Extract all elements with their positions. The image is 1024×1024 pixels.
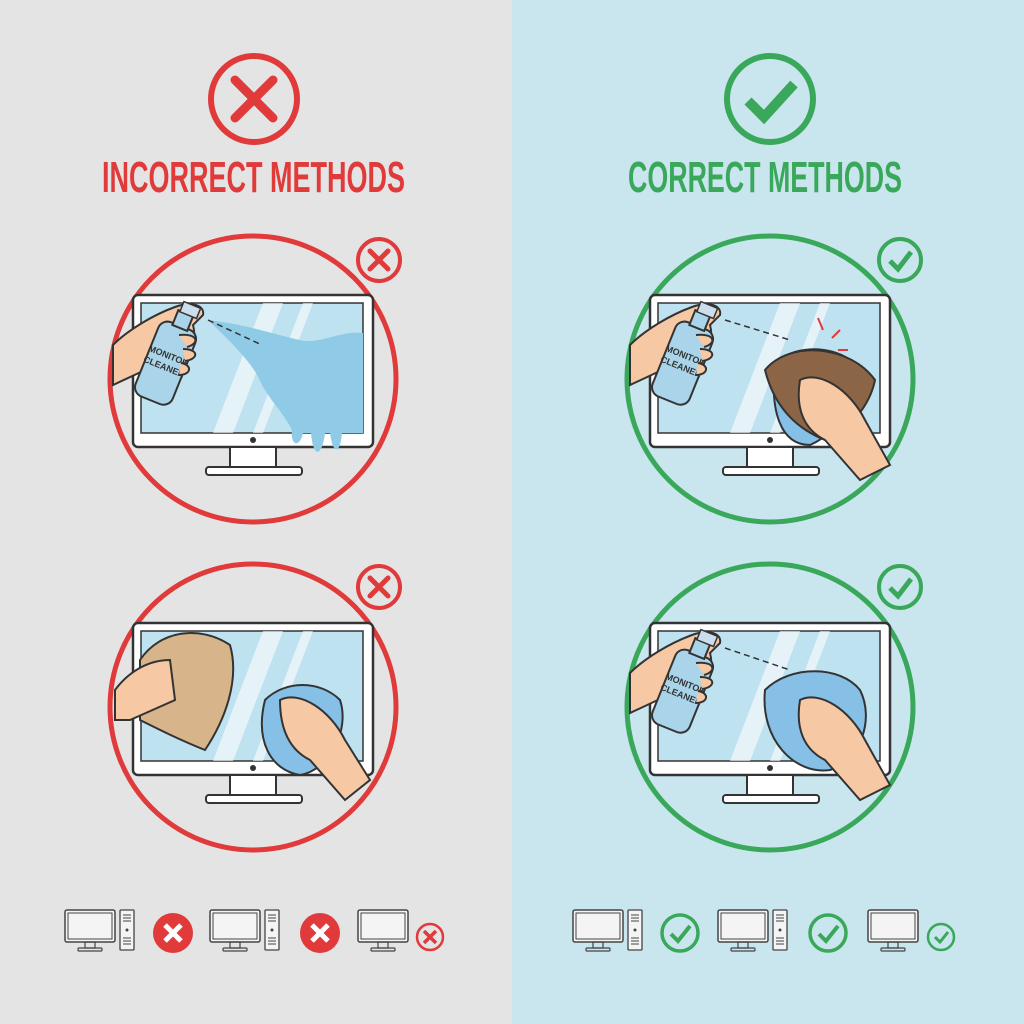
background left <box>0 0 512 1024</box>
badge x <box>358 239 400 281</box>
panel: spraying directly on screen (incorrect) <box>110 236 400 522</box>
background right <box>512 0 1024 1024</box>
title: incorrect methods: INCORRECT METHODS <box>102 153 405 202</box>
icon: big green check <box>727 56 813 142</box>
badge check <box>879 566 921 608</box>
panel: microfiber wipe (correct) <box>627 564 921 850</box>
badge x <box>358 566 400 608</box>
bottom row: correct icons <box>573 910 954 951</box>
panel: spray on cloth (correct) <box>627 236 921 522</box>
panel: rough cloth (incorrect) <box>110 564 400 850</box>
badge check <box>879 239 921 281</box>
water flood <box>208 320 363 452</box>
icon: big red x <box>211 56 297 142</box>
bottom row: incorrect icons <box>65 910 443 953</box>
